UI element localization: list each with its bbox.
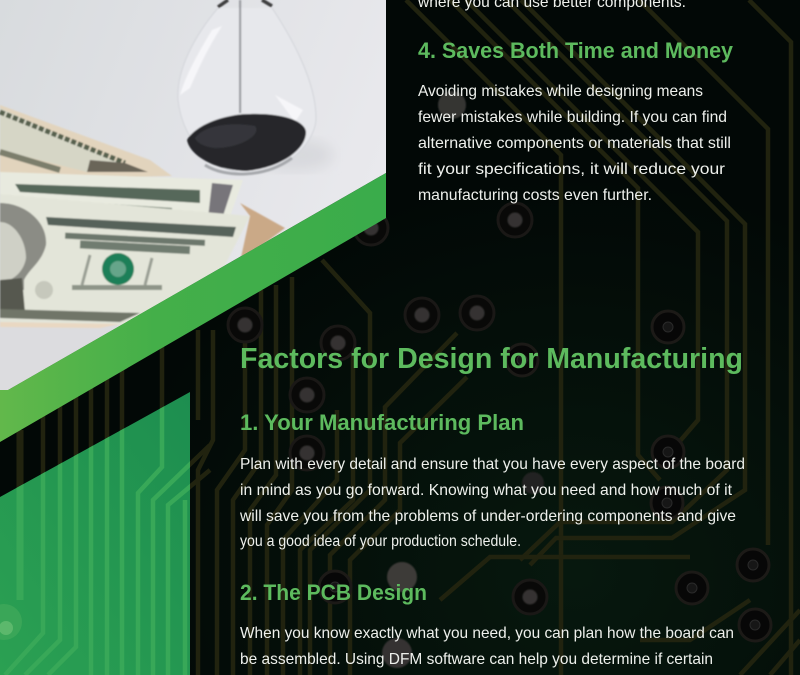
paragraph: pcb design: When you know exactly what you need, you can plan how the board can xyxy=(240,625,734,642)
heading: your manufacturing plan: 1. Your Manufacturing Plan xyxy=(240,410,524,435)
paragraph: manufacturing plan: Plan with every detail and ensure that you have every aspect of the board xyxy=(240,456,745,473)
heading: saves both time and money: 4. Saves Both Time and Money xyxy=(418,38,734,63)
green translucent panel with circuit traces xyxy=(0,392,190,675)
money stack xyxy=(0,105,285,328)
paragraph: saves time and money: fewer mistakes while building. If you can find xyxy=(418,109,727,126)
paragraph: pcb design: be assembled. Using DFM software can help you determine if certain xyxy=(240,651,713,668)
photo: hourglass and dollar bills xyxy=(0,0,386,395)
panel via xyxy=(0,604,22,640)
paragraph: pcb design xyxy=(240,625,734,668)
heading: the pcb design: 2. The PCB Design xyxy=(240,580,427,605)
paragraph: saves time and money: manufacturing costs even further. xyxy=(418,187,652,204)
paragraph: saves time and money: fit your specifications, it will reduce your xyxy=(418,161,726,178)
paragraph: saves time and money: Avoiding mistakes while designing means xyxy=(418,83,703,100)
paragraph: manufacturing plan: in mind as you go forward. Knowing what you need and how much of it xyxy=(240,482,733,499)
paragraph: saves time and money: alternative components or materials that still xyxy=(418,135,731,152)
paragraph: manufacturing plan xyxy=(239,456,745,550)
hourglass xyxy=(178,0,333,174)
paragraph: saves time and money xyxy=(418,83,731,204)
section 4 continuation text xyxy=(417,0,734,204)
title: factors for design for manufacturing: Factors for Design for Manufacturing xyxy=(240,343,743,375)
paragraph: manufacturing plan: will save you from the problems of under-ordering components and give xyxy=(239,508,736,525)
green diagonal band xyxy=(0,173,386,442)
paragraph: manufacturing plan: you a good idea of your production schedule. xyxy=(240,533,521,550)
circuit vias xyxy=(228,91,771,668)
